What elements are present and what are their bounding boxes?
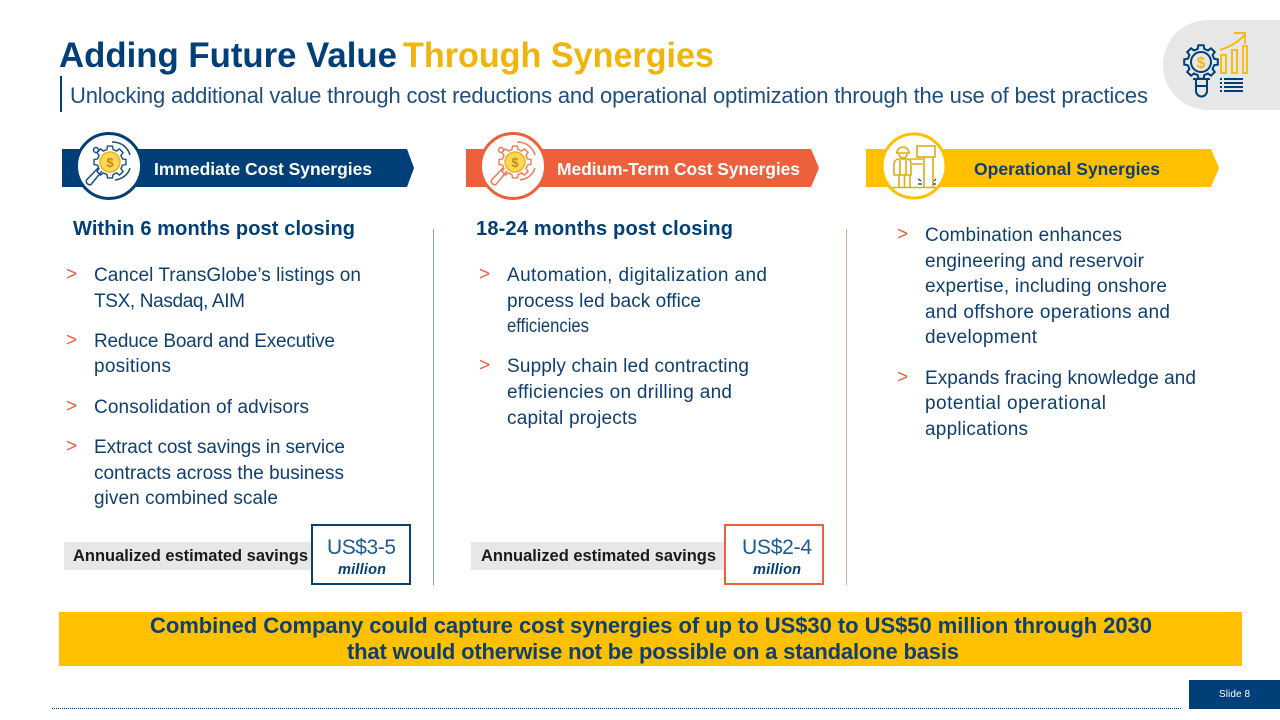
bullet list: operational: expertise, including onshore — [925, 276, 1167, 297]
bullet list: immediate — [66, 264, 361, 509]
bullet list: immediate: contracts across the business — [94, 463, 344, 484]
bullet list: immediate: > — [66, 264, 77, 285]
bullet list: operational: Combination enhances — [925, 225, 1122, 246]
bullet list: immediate: Consolidation of advisors — [94, 397, 309, 418]
panel: operational synergies — [866, 134, 1219, 440]
callout: combined company synergies — [59, 612, 1242, 666]
title: Adding Future Value — [59, 36, 397, 75]
savings callout: immediate: million — [338, 562, 386, 578]
bullet list: operational: Expands fracing knowledge and — [925, 368, 1196, 389]
banner: immediate cost synergies — [62, 134, 414, 198]
bullet list: immediate: TSX, Nasdaq, AIM — [94, 291, 245, 312]
icon: header gear and growth chart: $ — [1197, 55, 1206, 72]
panel: medium-term cost synergies — [466, 134, 823, 584]
bullet list: operational: applications — [925, 419, 1028, 440]
savings callout: medium-term: Annualized estimated savings — [481, 547, 716, 565]
heading: within 6 months: Within 6 months post closing — [73, 218, 355, 240]
bullet list: immediate: Cancel TransGlobe’s listings on — [94, 265, 361, 286]
savings callout: immediate: US$3-5 — [327, 536, 396, 559]
banner: medium-term cost synergies: $ — [511, 155, 519, 170]
savings callout: immediate — [64, 525, 410, 584]
bullet list: medium-term: Supply chain led contracting — [507, 356, 749, 377]
callout: combined company synergies: Combined Company could capture cost synergies of up to US$30 to US$50 million through 2030 — [150, 613, 1152, 638]
bullet list: immediate: > — [66, 396, 77, 417]
icon: header gear and growth chart — [1163, 20, 1280, 110]
bullet list: immediate: > — [66, 330, 77, 351]
panel: immediate cost synergies — [62, 134, 414, 584]
savings callout: medium-term: US$2-4 — [742, 536, 812, 559]
bullet list: operational: and offshore operations and — [925, 302, 1170, 323]
subtitle: Unlocking additional value through cost reductions and operational optimization through the use of best practices — [70, 83, 1148, 108]
title — [59, 36, 714, 75]
bullet list: immediate: positions — [94, 356, 171, 377]
slide number: Slide 8 — [1219, 689, 1250, 700]
callout: combined company synergies: that would otherwise not be possible on a standalone basis — [347, 639, 959, 664]
savings callout: medium-term — [471, 525, 823, 584]
heading: 18-24 months: 18-24 months post closing — [476, 218, 733, 240]
bullet list: operational: engineering and reservoir — [925, 251, 1145, 272]
bullet list: medium-term: Automation, digitalization and — [507, 265, 767, 286]
banner: immediate cost synergies: Immediate Cost Synergies — [154, 159, 372, 179]
icon: engineer with drilling rig — [893, 146, 936, 188]
banner: operational synergies — [866, 134, 1219, 198]
bullet list: medium-term: > — [479, 264, 490, 285]
bullet list: medium-term: efficiencies on drilling and — [507, 382, 732, 403]
savings callout: medium-term: million — [753, 562, 801, 578]
bullet list: medium-term: process led back office — [507, 291, 701, 312]
bullet list: immediate: Reduce Board and Executive — [94, 331, 335, 352]
savings callout: immediate: Annualized estimated savings — [73, 547, 308, 565]
banner: immediate cost synergies: $ — [106, 155, 114, 170]
banner: medium-term cost synergies: Medium-Term Cost Synergies — [557, 159, 800, 179]
banner: medium-term cost synergies — [466, 134, 819, 198]
bullet list: operational: > — [897, 224, 908, 245]
slide number — [1189, 680, 1280, 709]
bullet list: immediate: Extract cost savings in service — [94, 437, 345, 458]
bullet list: operational: development — [925, 327, 1038, 348]
bullet list: medium-term: efficiencies — [507, 316, 589, 337]
title: Through Synergies — [403, 36, 714, 75]
bullet list: operational — [897, 224, 1196, 440]
bullet list: operational: > — [897, 367, 908, 388]
bullet list: medium-term: capital projects — [507, 408, 637, 429]
bullet list: medium-term: > — [479, 355, 490, 376]
bullet list: operational: potential operational — [925, 393, 1106, 414]
bullet list: medium-term — [479, 264, 767, 429]
bullet list: immediate: given combined scale — [94, 488, 278, 509]
bullet list: immediate: > — [66, 436, 77, 457]
banner: operational synergies: Operational Synergies — [974, 159, 1160, 179]
